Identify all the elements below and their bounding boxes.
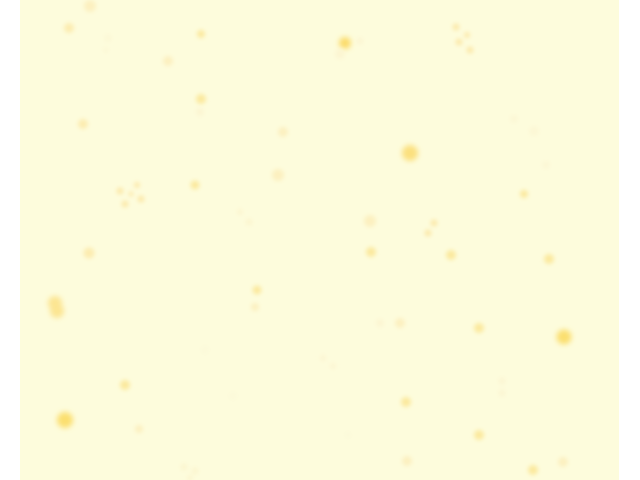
medium dots bbox=[64, 23, 554, 475]
dot clusters bbox=[116, 24, 474, 236]
faint dots bbox=[84, 0, 568, 480]
large bright dots bbox=[48, 37, 572, 428]
